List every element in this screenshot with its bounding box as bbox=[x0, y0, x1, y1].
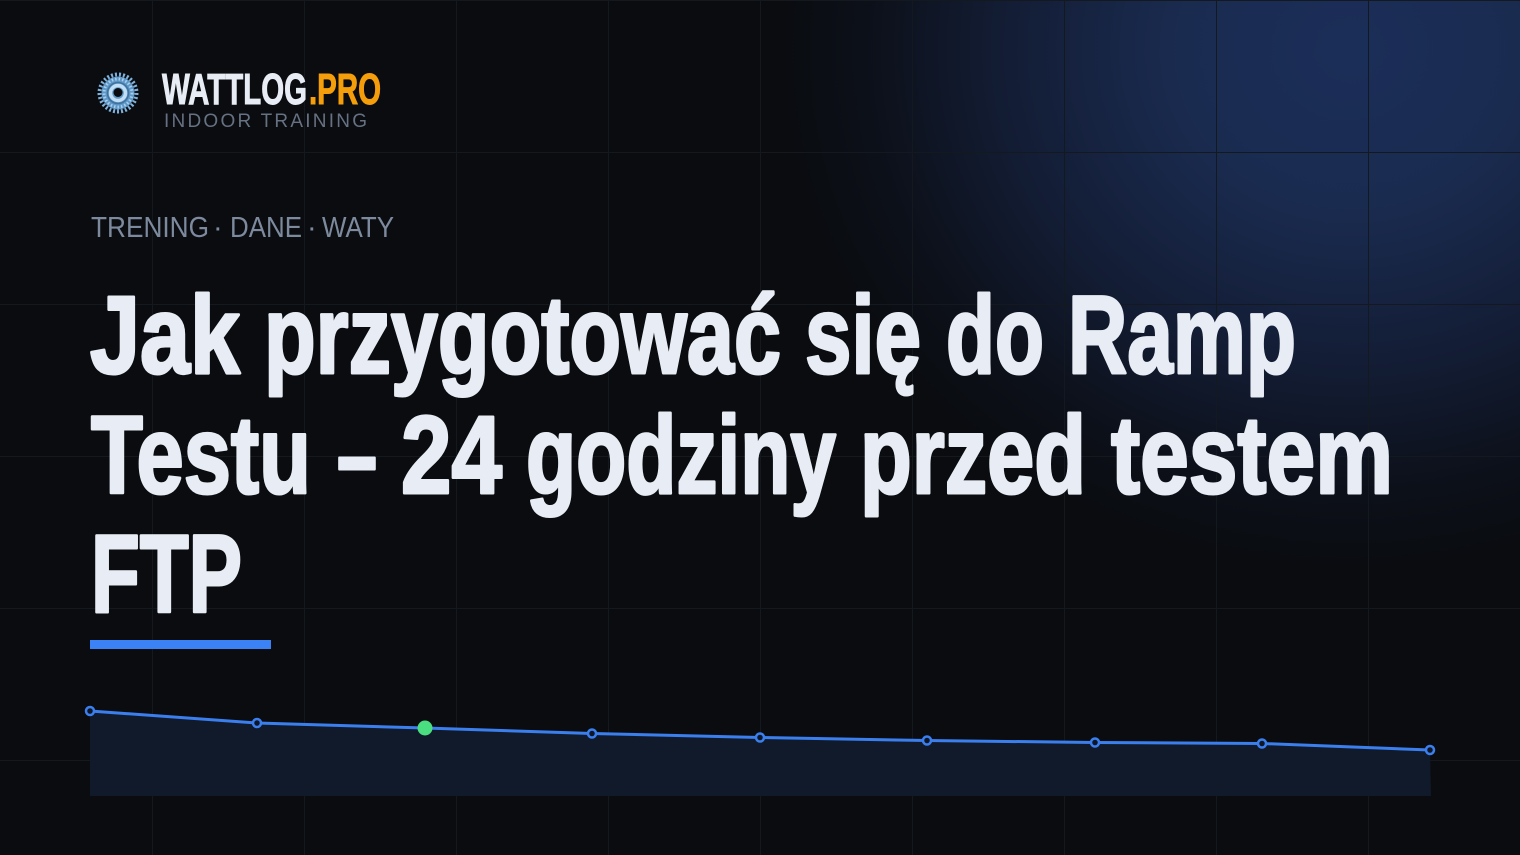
eyebrow text: · bbox=[213, 212, 223, 244]
title: – bbox=[337, 394, 377, 517]
eyebrow text: TRENING bbox=[91, 212, 209, 244]
title: Jak bbox=[90, 274, 241, 397]
title: przed bbox=[860, 394, 1086, 517]
title: 24 bbox=[401, 394, 502, 517]
title: się bbox=[805, 274, 921, 397]
title: przygotować bbox=[264, 274, 781, 397]
chart area fill bbox=[90, 711, 1431, 796]
title: do bbox=[946, 274, 1044, 397]
eyebrow text: DANE bbox=[230, 212, 302, 244]
chart line bbox=[90, 711, 1430, 750]
eyebrow text: · bbox=[307, 212, 317, 244]
line chart bbox=[86, 707, 1434, 796]
title: FTP bbox=[91, 513, 242, 636]
title bbox=[90, 274, 1393, 636]
eyebrow text bbox=[91, 212, 394, 244]
title: godziny bbox=[526, 394, 836, 517]
title: Ramp bbox=[1068, 274, 1296, 397]
brand name: WATTLOG bbox=[162, 65, 307, 114]
eyebrow text: WATY bbox=[322, 212, 394, 244]
icon: cassette gear logo bbox=[100, 74, 136, 112]
highlighted data point bbox=[418, 720, 432, 736]
title: testem bbox=[1111, 394, 1393, 517]
brand tagline: INDOOR TRAINING bbox=[164, 111, 367, 132]
title: Testu bbox=[91, 394, 311, 517]
chart data points bbox=[86, 707, 1434, 754]
brand name: .PRO bbox=[309, 65, 381, 114]
title accent underline bbox=[90, 640, 271, 649]
